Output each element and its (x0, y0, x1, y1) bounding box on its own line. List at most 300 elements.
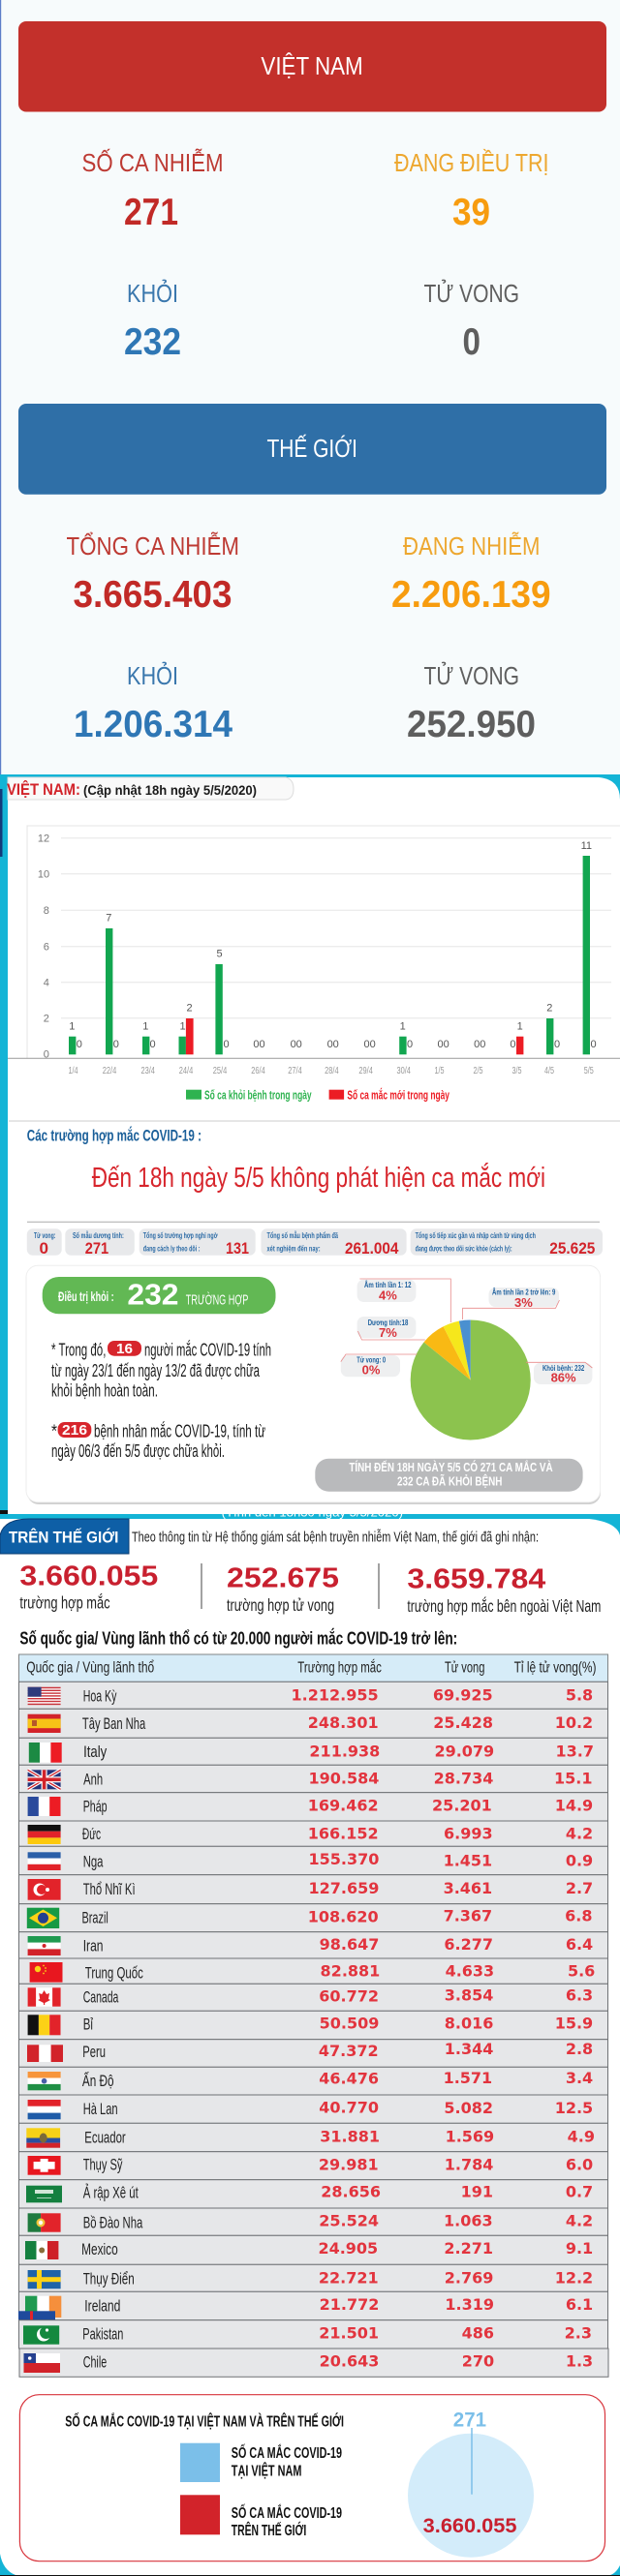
stat: số ca nhiễm: SỐ CA NHIỄM (81, 148, 223, 177)
chip: tiếp xúc gần: Tổng số tiếp xúc gần và nhập cảnh từ vùng dịch (416, 1230, 536, 1240)
pie label: khỏi bệnh (526, 1362, 592, 1385)
stat: đang nhiễm: 2.206.139 (391, 574, 551, 616)
row: Hà Lan (19, 2095, 608, 2123)
row: Hoa Kỳ: 1.212.955 (292, 1686, 379, 1705)
value labels: 1 (517, 1020, 523, 1032)
row: Iran: Iran (83, 1937, 103, 1955)
chip: số mẫu dương tính (65, 1228, 135, 1258)
stat: mắc bên ngoài Việt Nam (407, 1564, 601, 1616)
row: Canada: 3.854 (445, 1985, 493, 2004)
row: Iran: 6.4 (566, 1935, 593, 1954)
row: Hà Lan: 12.5 (555, 2099, 593, 2117)
icon: flag Netherlands (28, 2100, 61, 2119)
row: Hoa Kỳ: Hoa Kỳ (83, 1687, 117, 1706)
x axis labels: 27/4 (288, 1066, 302, 1076)
heading: comparison title: SỐ CA MẮC COVID-19 TẠI VIỆT NAM VÀ TRÊN THẾ GIỚI (65, 2411, 344, 2431)
row: Anh: 190.584 (309, 1770, 379, 1788)
row: Iran: 6.277 (444, 1935, 493, 1954)
text block: 16 recovered: người mắc COVID-19 tính (144, 1340, 271, 1360)
stat: khỏi (124, 278, 181, 363)
row: Bỉ (19, 2011, 608, 2040)
row: Canada: Canada (83, 1987, 119, 2006)
row: Italy: Italy (83, 1743, 108, 1761)
value labels: 0 (510, 1039, 515, 1050)
text block: 216 recovered: ngày 06/3 đến 5/5 được chữa khỏi. (51, 1441, 225, 1461)
row: Chile: 1.3 (566, 2352, 593, 2371)
row: Thụy Sỹ (19, 2152, 608, 2180)
panel: so sánh Việt Nam và thế giới (19, 2395, 604, 2561)
y axis ticks: 4 (44, 977, 49, 988)
row: Brazil (19, 1904, 608, 1932)
table header: Tử vong (445, 1660, 484, 1677)
pie label: khỏi bệnh: Khỏi bệnh: 232 (542, 1363, 584, 1373)
stat: đang điều trị: ĐANG ĐIỀU TRỊ (394, 148, 548, 177)
icon: flag USA (28, 1687, 61, 1705)
row: Ấn Độ: 46.476 (319, 2070, 379, 2088)
icon: flag Switzerland (28, 2156, 61, 2175)
row: Pháp (19, 1793, 608, 1821)
row: Canada (19, 1984, 608, 2011)
legend: thế giới: SỐ CA MẮC COVID-19 (232, 2502, 342, 2522)
icon: flag UK (28, 1770, 61, 1789)
pie label: âm tính lần 2: Âm tính lần 2 trở lên: 9 (492, 1287, 556, 1297)
text block: 216 recovered (51, 1420, 265, 1461)
y axis ticks (38, 833, 49, 1061)
text block: 216 recovered: bệnh nhân mắc COVID-19, tính từ (94, 1420, 265, 1440)
stat: số ca nhiễm: 271 (124, 192, 178, 233)
heading: Việt Nam banner (18, 21, 606, 112)
row: Tây Ban Nha: 248.301 (308, 1713, 379, 1732)
x axis labels: 2/5 (473, 1066, 483, 1076)
callout: tổng kết (315, 1459, 583, 1492)
panel: Việt Nam summary (18, 21, 606, 363)
text block: 16 recovered (51, 1340, 271, 1401)
x axis labels: 23/4 (140, 1066, 155, 1076)
pie label: âm tính lần 2: 3% (514, 1295, 533, 1310)
row: Thụy Sỹ: 29.981 (319, 2155, 379, 2173)
chart: proportion circle: 3.660.055 (423, 2515, 517, 2537)
value labels: 0 (554, 1039, 560, 1050)
row: Pháp: Pháp (83, 1798, 108, 1816)
row: Ả rập Xê út: 191 (461, 2182, 493, 2200)
stat: khỏi thế giới: KHỎI (127, 660, 178, 690)
pie label: dương tính: Dương tính:18 (368, 1318, 408, 1327)
row: Peru (19, 2040, 608, 2067)
heading: Việt Nam banner: VIỆT NAM (261, 51, 363, 80)
heading: table title: Số quốc gia/ Vùng lãnh thổ có từ 20.000 người mắc COVID-19 trở lên: (19, 1627, 457, 1648)
panel: Thế giới summary (18, 404, 606, 745)
row: Iran (19, 1932, 608, 1958)
stat: đang điều trị: 39 (452, 192, 490, 233)
row: Mexico: 9.1 (566, 2239, 593, 2258)
legend: thế giới: TRÊN THẾ GIỚI (232, 2521, 306, 2539)
table: countries (18, 1654, 608, 2377)
stat: tử vong thế giới (407, 660, 536, 745)
icon: flag China (30, 1962, 63, 1983)
row: Hà Lan: 40.770 (319, 2099, 379, 2117)
stat: tử vong thế giới: TỬ VONG (424, 660, 519, 690)
text block: 16 recovered: từ ngày 23/1 đến ngày 13/2 đã được chữa (51, 1361, 261, 1380)
x axis labels: 22/4 (103, 1066, 117, 1076)
x axis labels: 1/4 (68, 1066, 78, 1076)
icon: flag Turkey (28, 1879, 61, 1900)
value labels: 2 (186, 1003, 193, 1015)
chip: tử vong: 0 (39, 1239, 48, 1258)
row: Thụy Điển: 2.769 (445, 2268, 493, 2287)
icon: flag Mexico (25, 2241, 58, 2259)
stat: tử vong thế giới: 252.950 (407, 704, 536, 745)
table header (19, 1654, 608, 1682)
row: Ấn Độ: 3.4 (566, 2069, 593, 2087)
chip: số mẫu dương tính: 271 (85, 1239, 108, 1258)
chip: nghi ngờ: 131 (226, 1239, 249, 1258)
row: Ấn Độ: 1.571 (444, 2069, 492, 2087)
text block: 16 recovered: * Trong đó, (51, 1341, 106, 1360)
row: Bồ Đào Nha: Bồ Đào Nha (83, 2213, 143, 2231)
row: Pakistan: 2.3 (565, 2324, 592, 2343)
row: Trung Quốc: Trung Quốc (85, 1963, 143, 1982)
row: Hoa Kỳ: 69.925 (433, 1686, 493, 1705)
row: Ecuador: Ecuador (84, 2128, 126, 2146)
row: Hoa Kỳ: 5.8 (566, 1686, 593, 1705)
row: Trung Quốc: 4.633 (446, 1961, 494, 1980)
row: Pakistan (19, 2320, 608, 2349)
value labels: 1 (400, 1020, 406, 1032)
chip: nghi ngờ: đang cách ly theo dõi : (143, 1243, 201, 1253)
row: Pakistan: 486 (462, 2324, 494, 2343)
chip: tiếp xúc gần: 25.625 (549, 1239, 595, 1258)
x axis labels: 28/4 (325, 1066, 339, 1076)
row: Thổ Nhĩ Kì: 127.659 (309, 1879, 379, 1897)
row: Italy: 29.079 (434, 1742, 494, 1760)
row: Ả rập Xê út: 28.656 (321, 2182, 381, 2200)
row: Brazil: Brazil (81, 1909, 108, 1927)
icon: flag Portugal (28, 2213, 61, 2232)
row: Trung Quốc (19, 1958, 608, 1984)
callout: điều trị khỏi pill: Điều trị khỏi : (58, 1288, 114, 1304)
row: Tây Ban Nha: 10.2 (555, 1713, 593, 1732)
pie label: dương tính: 7% (379, 1325, 397, 1340)
value labels: 1 (180, 1020, 186, 1032)
table header: Quốc gia / Vùng lãnh thổ (26, 1659, 154, 1677)
chip: tiếp xúc gần: đang được theo dõi sức khỏe (cách ly): (416, 1243, 512, 1253)
row: Anh: 15.1 (554, 1770, 593, 1788)
callout: tổng kết: TÍNH ĐẾN 18H NGÀY 5/5 CÓ 271 CA MẮC VÀ (349, 1460, 553, 1474)
pie label: khỏi bệnh: 86% (551, 1371, 576, 1385)
row: Pakistan: Pakistan (82, 2325, 123, 2344)
panel: recovery card (26, 1265, 601, 1504)
row: Thụy Sỹ: 1.784 (445, 2155, 493, 2173)
legend: Số ca khỏi bệnh trong ngày (204, 1089, 312, 1103)
chip: mẫu bệnh phẩm: Tổng số mẫu bệnh phẩm đã (267, 1230, 338, 1240)
row: Đức: 6.993 (444, 1824, 493, 1842)
heading: trên thế giới tab: TRÊN THẾ GIỚI (9, 1528, 118, 1546)
stat: trường hợp tử vong: trường hợp tử vong (227, 1595, 334, 1615)
red bars (186, 1018, 523, 1054)
callout: tổng kết: 232 CA ĐÃ KHỎI BỆNH (397, 1473, 502, 1488)
stat: khỏi: KHỎI (127, 278, 178, 308)
row: Anh (19, 1765, 608, 1793)
row: Pakistan: 21.501 (319, 2324, 379, 2343)
value labels: 00 (253, 1039, 265, 1050)
value labels: 0 (113, 1039, 119, 1050)
stat: tử vong (424, 278, 519, 363)
row: Pháp: 14.9 (555, 1797, 593, 1815)
icon: flag Saudi Arabia (26, 2186, 62, 2202)
stat: đang điều trị (394, 148, 548, 233)
x axis labels (68, 1066, 594, 1076)
text block: 216 recovered: 216 (62, 1422, 87, 1439)
icon: flag Ireland (18, 2296, 61, 2320)
value labels: 0 (590, 1039, 597, 1050)
row: Brazil: 6.8 (565, 1906, 593, 1924)
row: Bỉ: 8.016 (445, 2015, 493, 2033)
row: Ả rập Xê út: Ả rập Xê út (83, 2184, 139, 2202)
row: Nga: 155.370 (309, 1850, 379, 1868)
y axis ticks: 0 (44, 1049, 49, 1061)
row: Trung Quốc: 82.881 (321, 1961, 380, 1980)
row: Ireland: Ireland (84, 2296, 120, 2315)
row: Thụy Điển (19, 2264, 608, 2291)
row: Italy (19, 1738, 608, 1765)
row: Trung Quốc: 5.6 (568, 1961, 595, 1980)
row: Hà Lan: 5.082 (444, 2099, 493, 2117)
stat chips row (27, 1228, 603, 1258)
icon: flag Russia (28, 1852, 61, 1870)
stat: trường hợp mắc (19, 1561, 158, 1613)
row: Bồ Đào Nha (19, 2208, 608, 2235)
value labels: 1 (142, 1020, 148, 1032)
icon: flag Canada (28, 1987, 61, 2007)
stat: tử vong: 0 (463, 321, 480, 363)
pie label: dương tính (357, 1317, 425, 1340)
pie label: tử vong (341, 1354, 418, 1377)
icon: flag Italy (29, 1743, 62, 1763)
row: Ireland (18, 2291, 608, 2320)
panel: Việt Nam detail (0, 774, 620, 1520)
x axis labels: 29/4 (358, 1066, 373, 1076)
heading: trên thế giới tab (0, 1519, 129, 1554)
legend (186, 1088, 450, 1103)
text block: 16 recovered: khỏi bệnh hoàn toàn. (51, 1381, 158, 1401)
stat: trường hợp tử vong: 252.675 (227, 1562, 339, 1593)
value labels: 00 (327, 1039, 339, 1050)
legend: Việt Nam (180, 2442, 342, 2482)
row: Thụy Điển: Thụy Điển (83, 2269, 135, 2288)
chart: proportion circle: 271 (453, 2409, 486, 2432)
pie label: âm tính lần 1 (357, 1279, 450, 1322)
row: Peru: Peru (82, 2043, 106, 2061)
row: Đức: 166.152 (308, 1824, 379, 1842)
row: Pháp: 25.201 (432, 1797, 492, 1815)
stat: trường hợp mắc: trường hợp mắc (19, 1592, 110, 1613)
row: Bỉ: 15.9 (555, 2015, 593, 2033)
icon: flag Pakistan (23, 2325, 59, 2345)
icon: flag Spain (28, 1714, 61, 1733)
stat: khỏi: 232 (124, 321, 181, 363)
row: Mexico (19, 2235, 608, 2264)
row: Thụy Sỹ: 6.0 (566, 2155, 593, 2173)
chip: mẫu bệnh phẩm: xét nghiệm đến nay: (267, 1243, 321, 1253)
x axis labels: 26/4 (251, 1066, 265, 1076)
chart: proportion circle (408, 2409, 534, 2558)
row: Brazil: 7.367 (444, 1906, 492, 1924)
heading: Việt Nam update tab: VIỆT NAM: (7, 780, 80, 799)
heading: Việt Nam update tab (7, 777, 294, 800)
value labels: 0 (223, 1039, 230, 1050)
y axis ticks: 2 (44, 1013, 49, 1024)
stat: đang nhiễm: ĐANG NHIỄM (403, 531, 541, 561)
stat: tổng ca nhiễm: 3.665.403 (74, 574, 232, 616)
row: Nga (19, 1846, 608, 1875)
row: Đức: Đức (82, 1825, 101, 1843)
value labels: 7 (106, 912, 111, 924)
row: Thổ Nhĩ Kì (19, 1875, 608, 1904)
row: Hoa Kỳ (19, 1682, 608, 1709)
legend: Số ca mắc mới trong ngày (347, 1088, 450, 1103)
row: Brazil: 108.620 (308, 1908, 379, 1926)
row: Bồ Đào Nha: 4.2 (566, 2211, 593, 2229)
stat: khỏi thế giới: 1.206.314 (74, 704, 232, 745)
y axis ticks: 6 (44, 941, 49, 953)
x axis labels: 25/4 (213, 1066, 228, 1076)
pie label: âm tính lần 1: Âm tính lần 1: 12 (364, 1279, 412, 1289)
row: Nga: 0.9 (566, 1851, 593, 1869)
panel: world detail (0, 1506, 620, 2576)
green bars (69, 856, 590, 1054)
row: Đức: 4.2 (566, 1824, 593, 1842)
stat: tử vong: TỬ VONG (424, 278, 519, 308)
row: Ireland: 1.319 (445, 2295, 494, 2314)
x axis labels: 24/4 (179, 1066, 194, 1076)
row: Thổ Nhĩ Kì: Thổ Nhĩ Kì (83, 1880, 136, 1898)
value labels: 1 (69, 1020, 75, 1032)
row: Pháp: 169.462 (308, 1797, 379, 1815)
icon: flag Germany (28, 1825, 61, 1844)
row: Thụy Điển: 12.2 (555, 2268, 593, 2287)
value labels: 11 (581, 840, 592, 852)
row: Nga: 1.451 (444, 1851, 492, 1869)
stat: khỏi thế giới (74, 660, 232, 745)
y axis ticks: 8 (44, 905, 49, 917)
row: Ấn Độ: Ấn Độ (82, 2072, 114, 2090)
row: Peru: 2.8 (566, 2040, 593, 2058)
chip: nghi ngờ (140, 1228, 256, 1258)
pie label: âm tính lần 2 (463, 1287, 560, 1319)
row: Chile: 270 (462, 2352, 494, 2371)
row: Chile (19, 2349, 608, 2377)
row: Thổ Nhĩ Kì: 2.7 (566, 1879, 593, 1897)
row: Thụy Sỹ: Thụy Sỹ (83, 2156, 123, 2174)
value labels: 00 (437, 1039, 450, 1050)
row: Bồ Đào Nha: 1.063 (444, 2211, 493, 2229)
row: Canada: 6.3 (566, 1985, 593, 2004)
row: Peru: 47.372 (319, 2042, 379, 2060)
x axis labels: 3/5 (512, 1066, 522, 1076)
row: Mexico: 2.271 (444, 2239, 493, 2258)
stat: đang nhiễm (391, 531, 551, 616)
panel: world detail: (Tính đến 18h30 ngày 5/5/2020) (222, 1506, 403, 1520)
row: Italy: 13.7 (556, 1742, 594, 1760)
chip: tử vong: Tử vong: (34, 1230, 56, 1240)
row: Ả rập Xê út: 0.7 (566, 2182, 593, 2200)
row: Thụy Điển: 22.721 (319, 2268, 379, 2287)
row: Tây Ban Nha: 25.428 (433, 1713, 493, 1732)
row: Mexico: 24.905 (318, 2239, 378, 2258)
icon: flag India (28, 2072, 61, 2090)
value labels: 00 (474, 1039, 485, 1050)
row: Peru: 1.344 (445, 2040, 493, 2058)
row: Bỉ: 50.509 (320, 2015, 379, 2033)
row: Bỉ: Bỉ (83, 2015, 93, 2034)
chip: tử vong (27, 1228, 62, 1258)
row: Canada: 60.772 (319, 1987, 379, 2006)
callout: điều trị khỏi pill (43, 1277, 276, 1314)
bar chart: daily cases (8, 826, 620, 1103)
y axis ticks: 10 (38, 869, 49, 881)
stat: trường hợp mắc: 3.660.055 (19, 1561, 158, 1591)
row: Ecuador: 1.569 (446, 2128, 494, 2146)
row: Bồ Đào Nha: 25.524 (319, 2211, 379, 2229)
legend: Việt Nam: SỐ CA MẮC COVID-19 (232, 2442, 342, 2462)
row: Mexico: Mexico (81, 2240, 118, 2258)
table header: Trường hợp mắc (297, 1658, 382, 1677)
icon: flag Iran (28, 1936, 61, 1955)
callout: điều trị khỏi pill: 232 (127, 1277, 178, 1311)
value labels: 0 (77, 1039, 82, 1050)
heading: Thế giới banner: THẾ GIỚI (267, 434, 357, 463)
value labels: 2 (546, 1003, 552, 1015)
icon: flag Brazil (27, 1908, 59, 1928)
value labels: 00 (291, 1039, 302, 1050)
chip: tiếp xúc gần (411, 1228, 603, 1258)
x axis labels: 30/4 (396, 1066, 411, 1076)
row: Ireland: 21.772 (320, 2295, 379, 2314)
row: Ả rập Xê út (19, 2180, 608, 2208)
chip: mẫu bệnh phẩm (261, 1228, 407, 1258)
callout: điều trị khỏi pill: TRƯỜNG HỢP (186, 1291, 248, 1308)
heading: các trường hợp: Các trường hợp mắc COVID-19 : (27, 1126, 202, 1144)
row: Italy: 211.938 (309, 1742, 380, 1760)
row: Ấn Độ (19, 2067, 608, 2095)
x axis labels: 4/5 (544, 1066, 554, 1076)
legend: Việt Nam: TẠI VIỆT NAM (232, 2461, 301, 2479)
icon: flag Peru (27, 2045, 63, 2062)
row: Nga: Nga (83, 1852, 104, 1870)
icon: flag Sweden (28, 2270, 61, 2288)
x axis labels: 5/5 (584, 1066, 594, 1076)
text block: 216 recovered: * (51, 1421, 57, 1440)
y axis ticks: 12 (38, 833, 49, 844)
row: Đức (19, 1821, 608, 1846)
row: Chile: 20.643 (320, 2352, 379, 2371)
row: Ecuador: 4.9 (568, 2128, 595, 2146)
row: Thổ Nhĩ Kì: 3.461 (444, 1879, 492, 1897)
icon: flag France (28, 1797, 61, 1816)
chip: số mẫu dương tính: Số mẫu dương tính: (73, 1230, 124, 1240)
value labels: 0 (149, 1039, 156, 1050)
legend: thế giới (180, 2495, 342, 2539)
x axis labels: 1/5 (434, 1066, 445, 1076)
icon: flag Belgium (28, 2015, 61, 2035)
row: Ireland: 6.1 (566, 2295, 593, 2314)
row: Tây Ban Nha (19, 1709, 608, 1738)
icon: flag Ecuador (26, 2128, 60, 2148)
chip: mẫu bệnh phẩm: 261.004 (345, 1239, 399, 1258)
value labels: 0 (407, 1039, 413, 1050)
value labels: 5 (216, 949, 223, 960)
pie label: tử vong: Tử vong: 0 (356, 1355, 386, 1365)
